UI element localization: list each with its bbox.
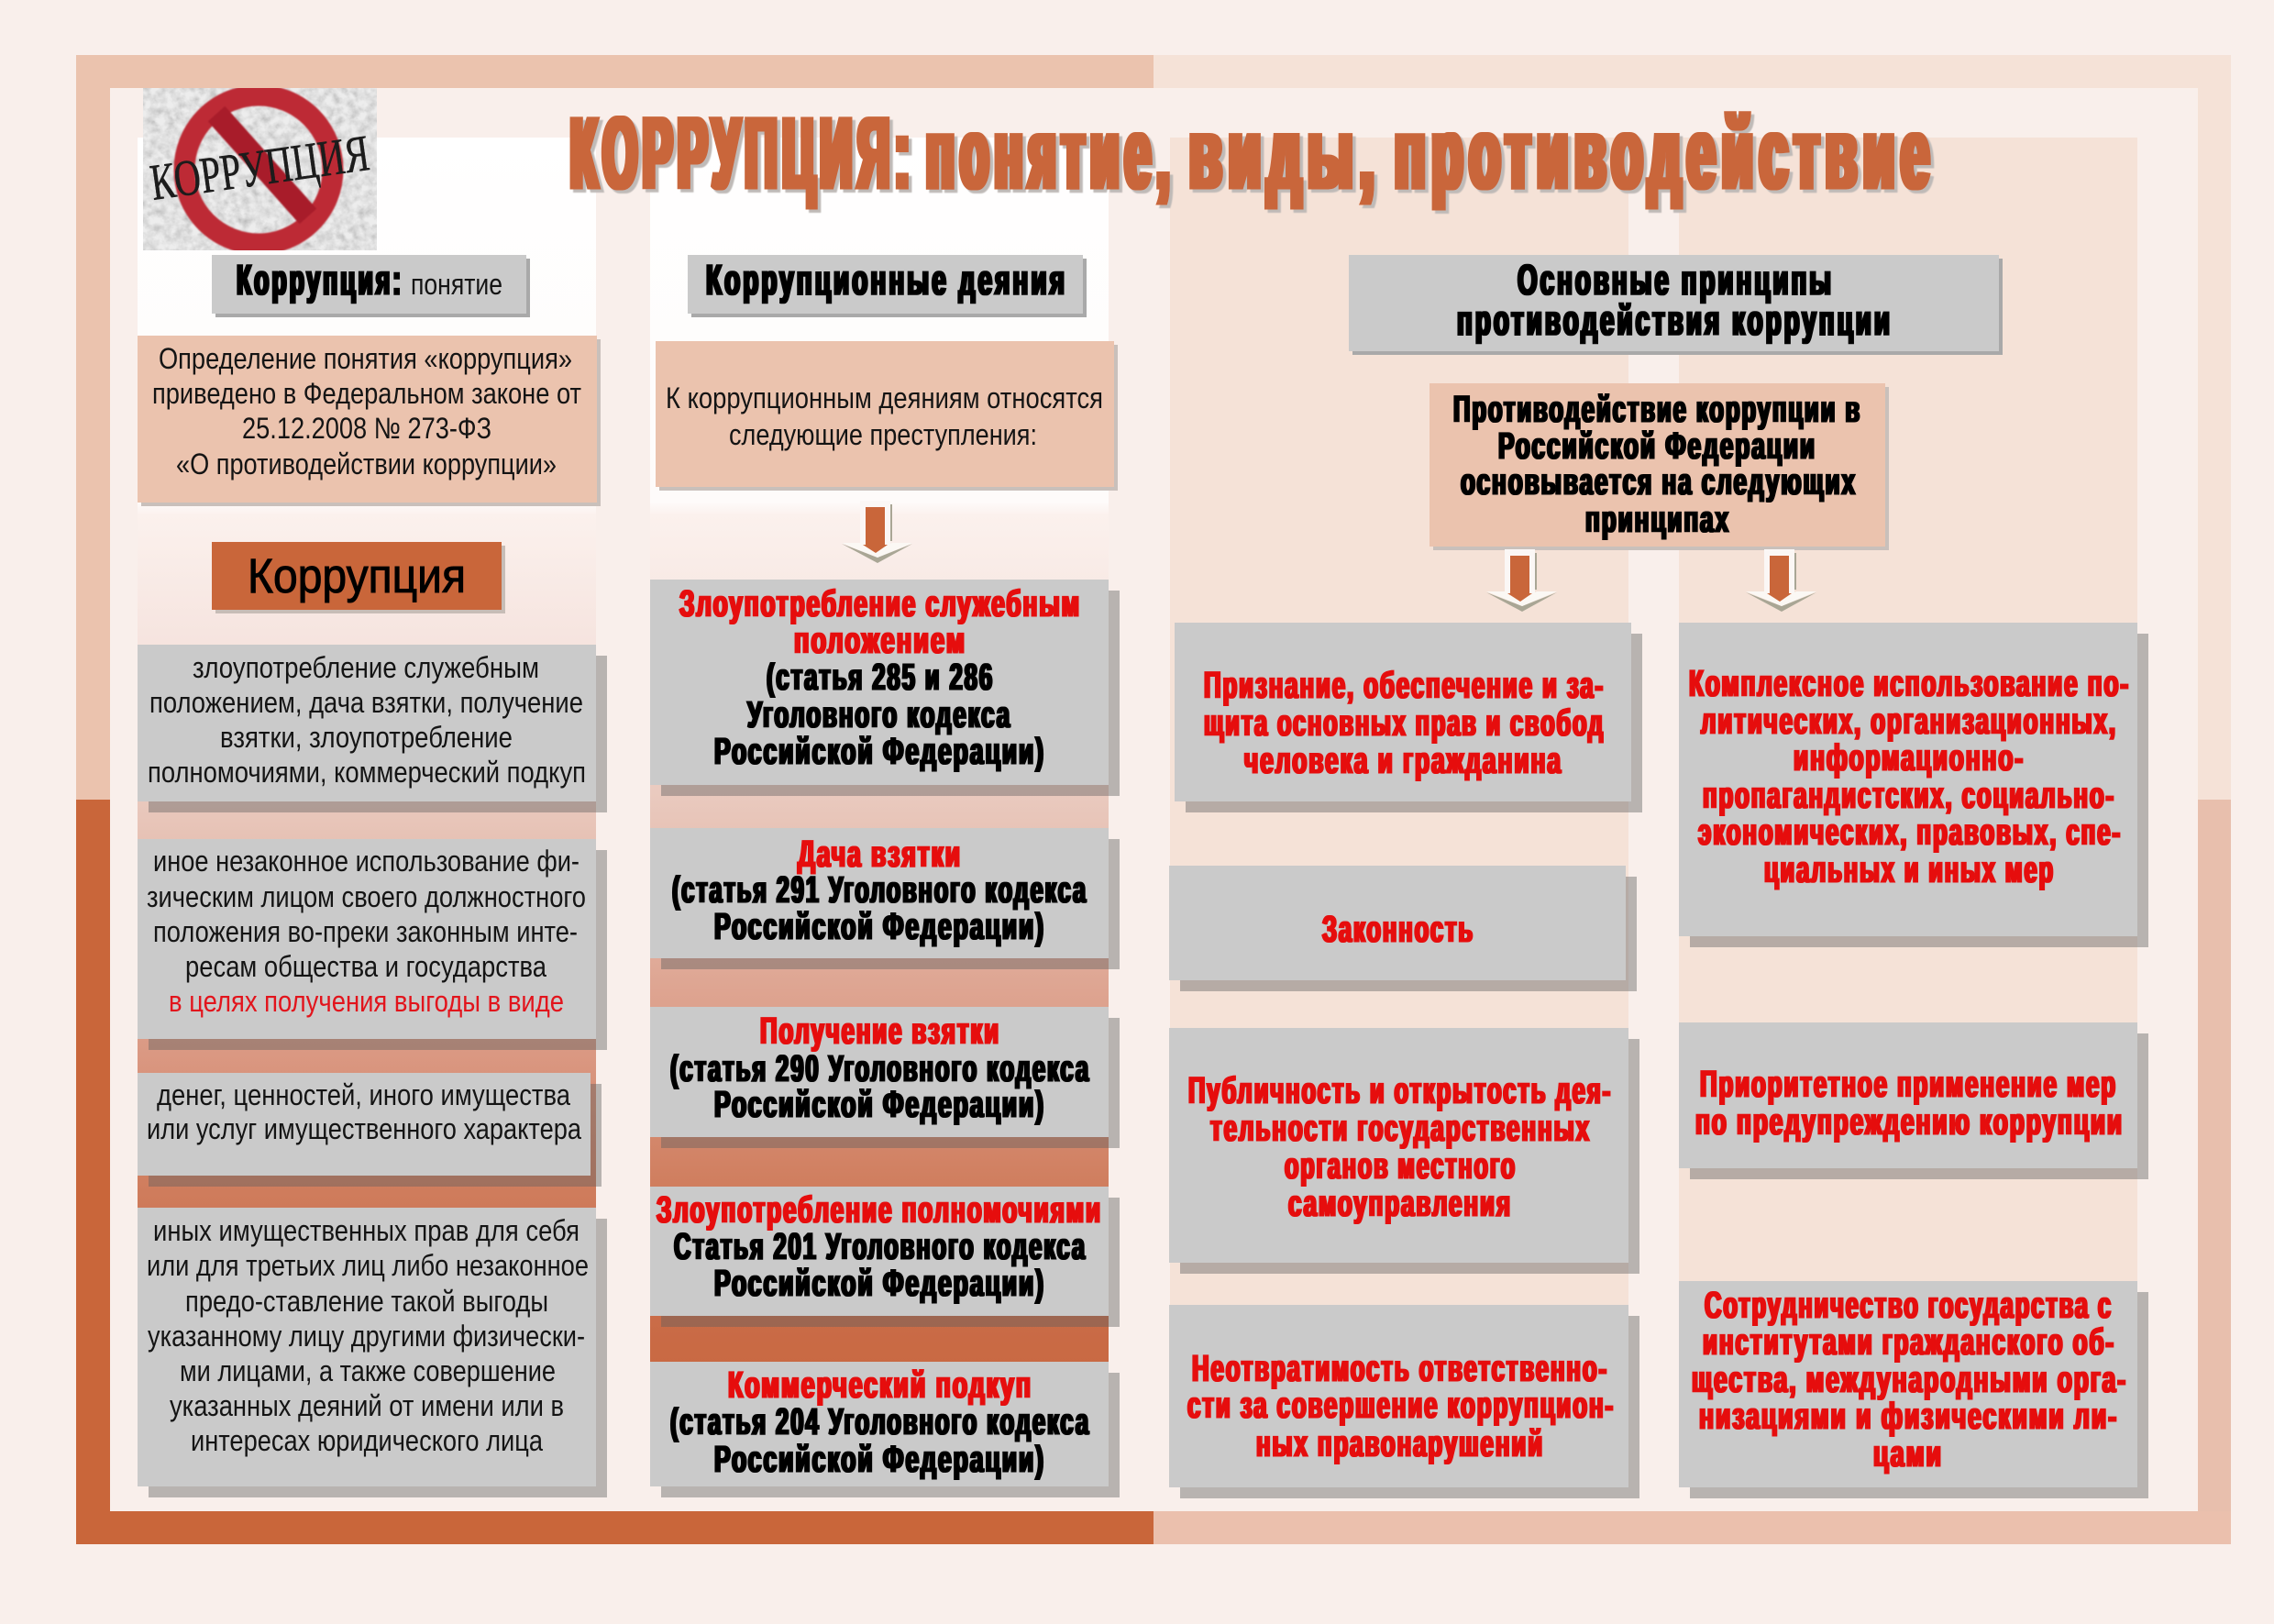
principle: comprehensive measures: циальных и иных мер	[1764, 848, 2055, 890]
principle: cooperation	[1679, 1281, 2148, 1498]
text box: other property rights: или для третьих лиц либо незаконное	[147, 1249, 589, 1282]
callout: basis of counteraction: Российской Федерации	[1498, 425, 1816, 467]
column backgrounds	[138, 138, 2137, 1486]
arrow down right	[1746, 549, 1816, 612]
text box: other illegal use: в целях получения выгоды в виде	[169, 985, 564, 1018]
principle: legality: Законность	[1322, 908, 1474, 950]
principle: transparency	[1169, 1028, 1639, 1274]
act: commercial bribery: Коммерческий подкуп	[728, 1364, 1032, 1406]
text box: money and valuables: денег, ценностей, иного имущества	[157, 1078, 571, 1111]
label: corruption: Коррупция	[248, 549, 466, 603]
title: понятие,	[926, 97, 1176, 210]
heading: basic principles: противодействия коррупции	[1457, 296, 1893, 344]
panel: concept of corruption	[138, 255, 607, 1497]
image: stop corruption sign	[143, 88, 377, 250]
principle: cooperation: цами	[1873, 1432, 1943, 1475]
heading: basic principles	[1349, 255, 2003, 355]
act: giving a bribe: Российской Федерации)	[714, 905, 1045, 947]
text box: other illegal use: положения во-преки законным инте-	[153, 915, 578, 948]
act: commercial bribery: (статья 204 Уголовного кодекса	[670, 1400, 1090, 1442]
definition text block: «О противодействии коррупции»	[176, 447, 557, 481]
act: receiving a bribe: Российской Федерации)	[714, 1083, 1045, 1125]
principle: inevitability of liability: сти за совершение коррупцион-	[1187, 1384, 1615, 1426]
principle: rights and freedoms: щита основных прав и свобод	[1204, 702, 1605, 744]
panel: corruption acts	[650, 255, 1120, 1497]
text box: abuse of position: полномочиями, коммерческий подкуп	[148, 756, 586, 789]
panel: principles of countering corruption	[1169, 255, 2148, 1498]
text box: other illegal use: зическим лицом своего должностного	[147, 880, 586, 913]
principle: rights and freedoms: человека и гражданина	[1244, 739, 1562, 781]
act: giving a bribe: Дача взятки	[798, 833, 962, 875]
text box: abuse of position: положением, дача взятки, получение	[149, 686, 583, 719]
text box: other illegal use: иное незаконное использование фи-	[153, 845, 580, 878]
heading: corruption concept	[212, 255, 530, 317]
text box: money and valuables: или услуг имущественного характера	[147, 1112, 582, 1145]
heading: corruption concept: Коррупция:	[237, 256, 403, 304]
arrow down left	[1486, 549, 1557, 612]
principle: inevitability of liability: ных правонарушений	[1256, 1422, 1544, 1464]
principle: rights and freedoms	[1175, 623, 1642, 812]
intro text	[656, 341, 1118, 491]
principle: transparency: Публичность и открытость дея-	[1188, 1069, 1612, 1111]
principle: legality	[1169, 866, 1637, 991]
heading: corruption acts	[688, 255, 1087, 317]
act: abuse of office	[650, 580, 1120, 796]
principle: transparency: самоуправления	[1288, 1182, 1512, 1224]
title: виды,	[1189, 97, 1381, 210]
callout: basis of counteraction: принципах	[1585, 498, 1730, 540]
principle: comprehensive measures: информационно-	[1794, 736, 2025, 779]
principle: prevention priority	[1679, 1022, 2148, 1179]
callout: basis of counteraction	[1430, 383, 1889, 550]
arrow down	[842, 501, 912, 563]
principle: transparency: тельности государственных	[1210, 1107, 1591, 1149]
text box: other property rights: ми лицами, а также совершение	[180, 1354, 556, 1387]
principle: transparency: органов местного	[1285, 1144, 1517, 1187]
principle: comprehensive measures	[1679, 623, 2148, 947]
definition text block: Определение понятия «коррупция»	[159, 342, 572, 375]
principle: rights and freedoms: Признание, обеспечение и за-	[1204, 664, 1605, 706]
act: commercial bribery	[650, 1362, 1120, 1497]
principle: inevitability of liability	[1169, 1305, 1639, 1498]
act: abuse of office: Злоупотребление служебным	[679, 582, 1081, 624]
act: abuse of office: Уголовного кодекса	[747, 693, 1011, 735]
act: giving a bribe: (статья 291 Уголовного кодекса	[672, 868, 1087, 911]
text box: other property rights	[138, 1208, 607, 1497]
act: receiving a bribe: Получение взятки	[760, 1010, 1000, 1052]
act: abuse of powers: Статья 201 Уголовного кодекса	[674, 1225, 1087, 1267]
text box: abuse of position: взятки, злоупотребление	[220, 721, 513, 754]
text box: abuse of position: злоупотребление служебным	[193, 651, 539, 684]
text box: other illegal use: ресам общества и государства	[185, 950, 547, 983]
title	[570, 97, 1936, 210]
principle: inevitability of liability: Неотвратимость ответственно-	[1192, 1347, 1608, 1389]
text box: other property rights: иных имущественных прав для себя	[153, 1214, 580, 1247]
text box: other property rights: интересах юридического лица	[191, 1424, 544, 1457]
heading: basic principles: Основные принципы	[1518, 256, 1834, 304]
text box: other property rights: указанных деяний от имени или в	[170, 1389, 564, 1422]
image: stop corruption sign: КОРРУПЦИЯ	[147, 125, 372, 212]
text box: money and valuables	[138, 1073, 602, 1187]
title: КОРРУПЦИЯ:	[570, 97, 915, 210]
act: commercial bribery: Российской Федерации)	[714, 1438, 1045, 1480]
act: abuse of office: положением	[794, 619, 966, 661]
act: abuse of office: Российской Федерации)	[714, 730, 1045, 772]
definition text block	[138, 336, 601, 506]
heading: corruption concept: понятие	[411, 268, 502, 301]
text box: other illegal use	[138, 839, 607, 1050]
act: abuse of office: (статья 285 и 286	[767, 656, 994, 698]
text box: other property rights: предо-ставление такой выгоды	[185, 1285, 548, 1318]
heading: corruption acts: Коррупционные деяния	[706, 256, 1067, 304]
act: receiving a bribe	[650, 1007, 1120, 1148]
text box: abuse of position	[138, 645, 607, 812]
definition text block: 25.12.2008 № 273-ФЗ	[242, 412, 491, 445]
act: receiving a bribe: (статья 290 Уголовного кодекса	[670, 1047, 1090, 1089]
act: giving a bribe	[650, 828, 1120, 969]
act: abuse of powers: Российской Федерации)	[714, 1262, 1045, 1304]
intro text: следующие преступления:	[729, 418, 1037, 451]
definition text block: приведено в Федеральном законе от	[152, 377, 581, 410]
text box: other property rights: указанному лицу другими физически-	[148, 1320, 585, 1353]
act: abuse of powers	[650, 1187, 1120, 1327]
callout: basis of counteraction: Противодействие коррупции в	[1453, 388, 1861, 430]
intro text: К коррупционным деяниям относятся	[666, 381, 1103, 414]
callout: basis of counteraction: основывается на следующих	[1461, 460, 1857, 503]
label: corruption	[212, 542, 505, 613]
act: abuse of powers: Злоупотребление полномочиями	[657, 1188, 1102, 1231]
